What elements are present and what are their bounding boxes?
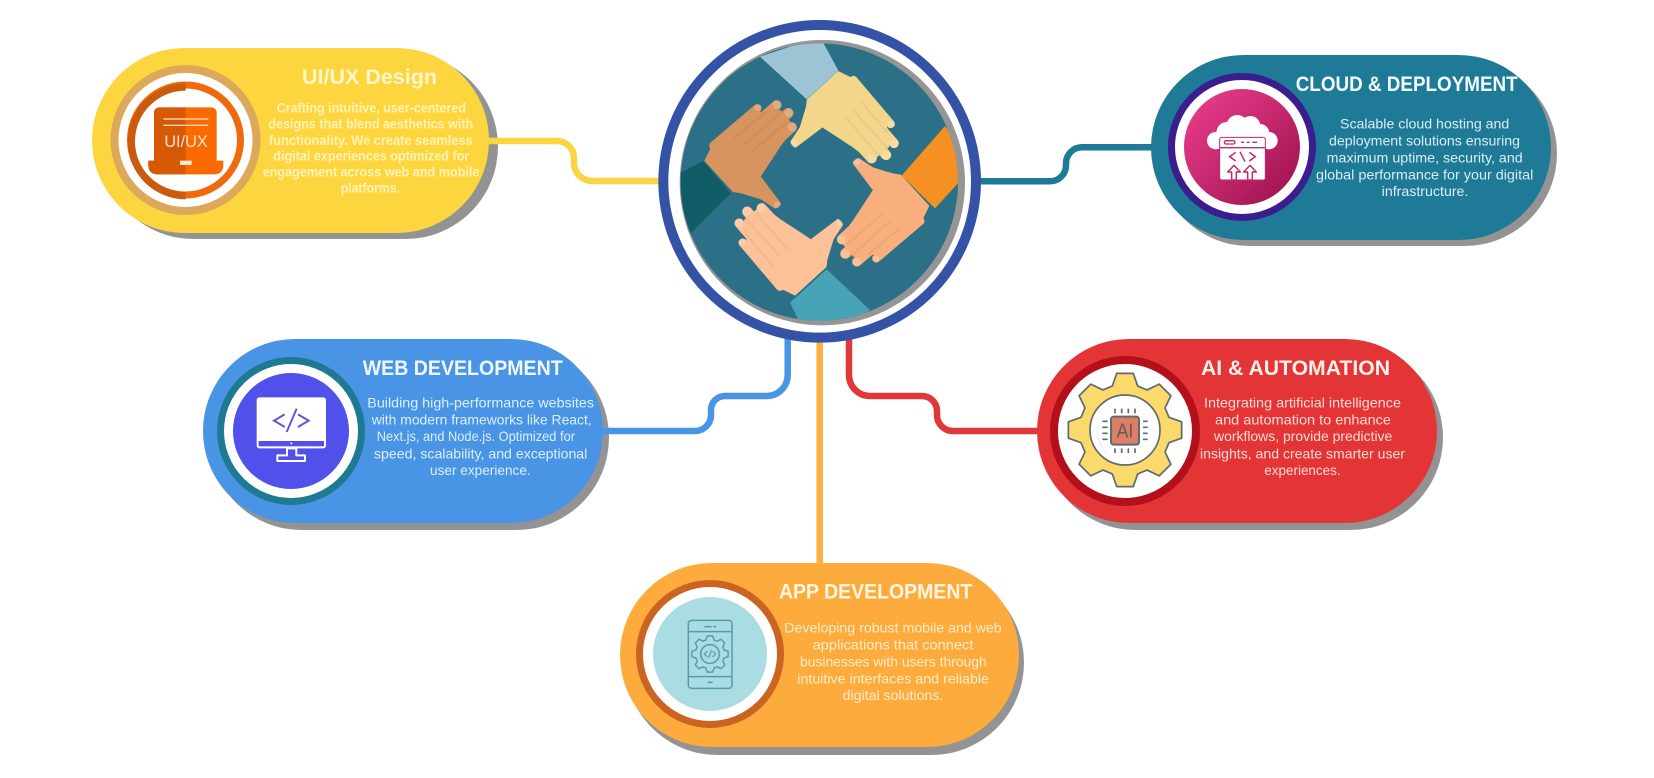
text block: App description: businesses with users through bbox=[800, 653, 987, 669]
text block: Web description bbox=[367, 394, 594, 478]
text block: App description: intuitive interfaces and reliable bbox=[797, 670, 989, 686]
panel: UI/UX Design bbox=[92, 48, 498, 239]
icon: AI gear bbox=[1054, 360, 1196, 502]
text block: Web description: with modern frameworks like React, bbox=[371, 411, 592, 427]
icon: AI gear: AI bbox=[1117, 421, 1133, 443]
sleeves bbox=[680, 43, 958, 321]
text block: AI description: Integrating artificial intelligence bbox=[1204, 394, 1401, 410]
panel: AI & Automation bbox=[1037, 339, 1443, 530]
text block: App description: digital solutions. bbox=[843, 687, 943, 703]
text block: Cloud description: Scalable cloud hosting and bbox=[1340, 115, 1509, 131]
text block: UI/UX description bbox=[263, 100, 480, 196]
text block: Cloud description: maximum uptime, security, and bbox=[1327, 149, 1523, 165]
text block: Cloud description bbox=[1316, 115, 1533, 199]
connector: AI bbox=[849, 338, 1040, 431]
text block: Cloud description: deployment solutions ensuring bbox=[1329, 133, 1520, 149]
text block: UI/UX description: platforms. bbox=[341, 180, 400, 196]
connector: Web bbox=[600, 338, 788, 431]
text block: UI/UX description: designs that blend aesthetics with bbox=[268, 116, 473, 132]
text block: Web description: speed, scalability, and exceptional bbox=[374, 445, 587, 461]
text block: AI description: workflows, provide predictive bbox=[1213, 428, 1393, 444]
heading: Cloud & Deployment: CLOUD & DEPLOYMENT bbox=[1296, 73, 1518, 96]
text block: UI/UX description: engagement across web and mobile bbox=[263, 164, 480, 180]
heading: App Development: APP DEVELOPMENT bbox=[779, 580, 972, 603]
connector: Cloud bbox=[980, 147, 1153, 181]
text block: App description: Developing robust mobile and web bbox=[784, 619, 1002, 635]
brown hand bbox=[705, 100, 796, 208]
text block: AI description: experiences. bbox=[1264, 462, 1341, 478]
icon: cloud deployment bbox=[1172, 76, 1312, 218]
text block: Web description: Building high-performance websites bbox=[367, 394, 594, 410]
text block: Cloud description: infrastructure. bbox=[1382, 183, 1468, 199]
text block: UI/UX description: digital experiences optimized for bbox=[273, 148, 470, 164]
central teamwork hands illustration bbox=[663, 25, 976, 338]
text block: Web description: user experience. bbox=[430, 462, 531, 478]
peach hand bbox=[837, 158, 928, 266]
connector: UI/UX bbox=[487, 141, 660, 181]
heading: UI/UX Design: UI/UX Design bbox=[302, 66, 437, 89]
heading: AI & Automation: AI & AUTOMATION bbox=[1201, 357, 1390, 380]
panel: App Development bbox=[620, 563, 1024, 755]
icon: UI/UX laptop bbox=[114, 69, 256, 211]
text block: Cloud description: global performance for your digital bbox=[1316, 166, 1533, 182]
icon: monitor with code bbox=[220, 360, 362, 502]
connector: App bbox=[816, 338, 823, 565]
icon: UI/UX laptop: UI/UX bbox=[164, 132, 208, 151]
yellow hand bbox=[791, 72, 899, 163]
text block: App description: applications that connect bbox=[813, 636, 973, 652]
text block: Web description: Next.js, and Node.js. Optimized for bbox=[377, 428, 575, 444]
heading: Web Development: WEB DEVELOPMENT bbox=[363, 357, 563, 380]
text block: AI description: and automation to enhance bbox=[1215, 411, 1391, 427]
text block: AI description: insights, and create smarter user bbox=[1200, 445, 1405, 461]
panel: Cloud & Deployment bbox=[1151, 55, 1557, 246]
light hand bbox=[735, 204, 843, 295]
text block: UI/UX description: Crafting intuitive, user-centered bbox=[277, 100, 466, 116]
text block: UI/UX description: functionality. We create seamless bbox=[269, 132, 473, 148]
icon: mobile app bbox=[640, 584, 780, 724]
text block: AI description bbox=[1200, 394, 1405, 478]
panel: Web Development bbox=[203, 339, 609, 530]
text block: App description bbox=[784, 619, 1002, 703]
